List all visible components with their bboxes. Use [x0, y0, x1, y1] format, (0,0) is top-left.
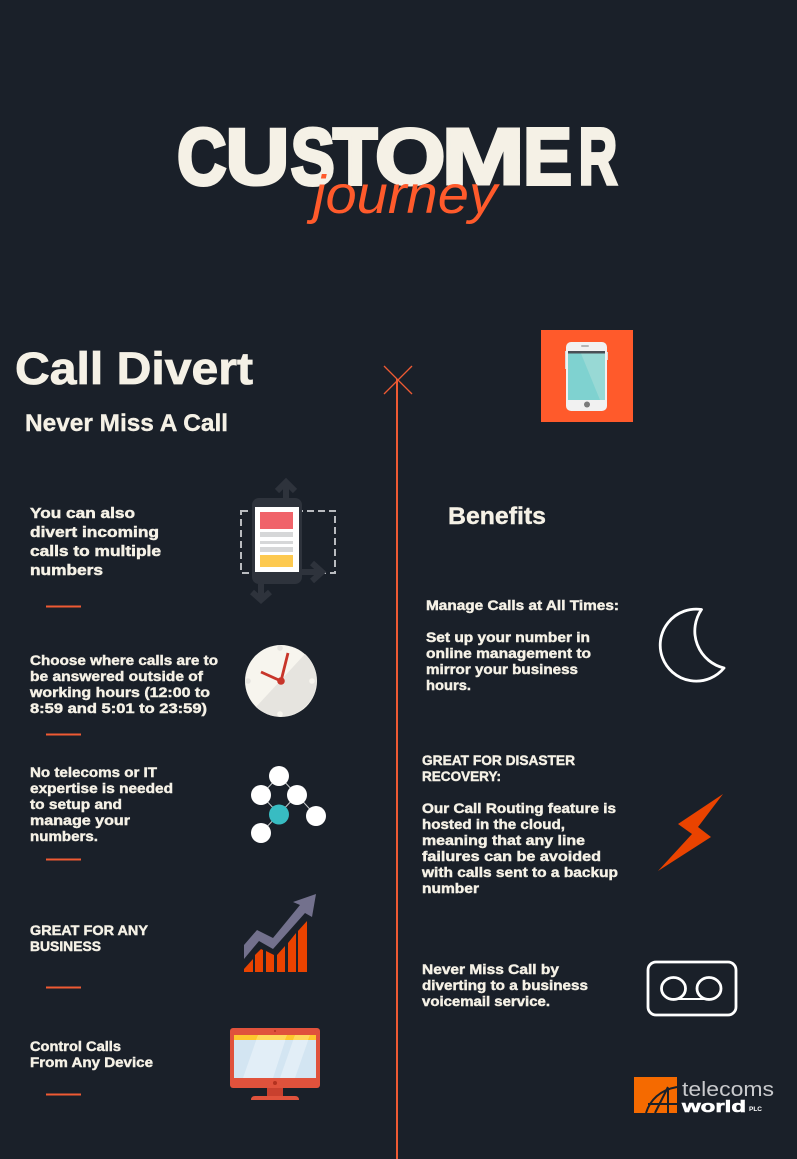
text: no telecoms expertise: No telecoms or IT — [30, 764, 157, 780]
logo: telecoms world: telecoms — [682, 1079, 774, 1101]
title: CUSTOMER — [177, 112, 617, 201]
text: choose where calls are answered: 8:59 and 5:01 to 23:59) — [30, 700, 207, 716]
icon: lightning bolt — [658, 794, 723, 871]
text: manage calls at all times: mirror your business — [426, 661, 578, 677]
divider — [46, 986, 81, 988]
text: great for disaster recovery: failures can be avoided — [422, 848, 601, 864]
text: manage calls at all times: hours. — [426, 677, 471, 693]
text: no telecoms expertise: manage your — [30, 812, 131, 828]
logo: telecoms world — [634, 1077, 774, 1116]
text: great for disaster recovery: with calls sent to a backup — [421, 864, 618, 880]
text: great for disaster recovery: RECOVERY: — [422, 768, 501, 784]
icon: smartphone on orange square — [541, 330, 633, 422]
text: choose where calls are answered: Choose where calls are to — [30, 652, 218, 668]
icon: growth chart — [244, 894, 316, 972]
icon: voicemail — [648, 962, 736, 1015]
divider — [46, 858, 81, 860]
text: never miss call voicemail — [422, 961, 588, 1009]
text: great for any business: BUSINESS — [30, 938, 101, 954]
text: divert to multiple numbers — [30, 505, 161, 579]
text: divert to multiple numbers: divert incoming — [30, 524, 159, 541]
text: choose where calls are answered — [29, 652, 218, 716]
text: great for disaster recovery: number — [422, 880, 480, 896]
text: great for disaster recovery: GREAT FOR DISASTER — [422, 752, 575, 768]
icon: crescent moon — [660, 609, 724, 681]
divider — [46, 606, 81, 608]
heading: Call Divert: Call Divert — [15, 343, 253, 394]
text: never miss call voicemail: Never Miss Call by — [422, 961, 559, 977]
title: CUSTOMER: R — [579, 112, 617, 201]
title: CUSTOMER: M — [442, 112, 525, 201]
logo: telecoms world: PLC — [749, 1107, 763, 1113]
text: divert to multiple numbers: You can also — [30, 505, 135, 522]
text: great for disaster recovery: Our Call Routing feature is — [422, 800, 616, 816]
text: no telecoms expertise: to setup and — [30, 796, 122, 812]
icon: desktop monitor — [230, 1028, 320, 1100]
icon: clock — [245, 645, 317, 717]
text: no telecoms expertise: expertise is needed — [30, 780, 173, 796]
text: great for any business — [30, 922, 149, 954]
text: divert to multiple numbers: calls to multiple — [30, 543, 161, 560]
text: great for disaster recovery — [421, 752, 618, 896]
text: choose where calls are answered: working hours (12:00 to — [29, 684, 210, 700]
text: manage calls at all times: Set up your number in — [426, 629, 590, 645]
title: CUSTOMER: O — [375, 112, 446, 201]
text: control calls from any device: Control Calls — [30, 1038, 121, 1054]
title: CUSTOMER: U — [225, 112, 290, 201]
icon: phone with arrows — [241, 482, 335, 600]
text: control calls from any device — [30, 1038, 153, 1070]
icon: network nodes — [251, 766, 326, 843]
text: control calls from any device: From Any Device — [30, 1054, 153, 1070]
logo: telecoms world: world — [681, 1097, 746, 1116]
subtitle: journey: journey — [306, 165, 500, 225]
title: CUSTOMER: E — [523, 112, 572, 201]
text: manage calls at all times: online management to — [426, 645, 591, 661]
text: manage calls at all times: Manage Calls at All Times: — [426, 597, 619, 613]
divider — [46, 734, 81, 736]
divider — [46, 1094, 81, 1096]
subheading: Never Miss A Call: Never Miss A Call — [25, 410, 228, 437]
text: no telecoms expertise: numbers. — [30, 828, 98, 844]
text: divert to multiple numbers: numbers — [30, 562, 103, 579]
title: CUSTOMER: C — [177, 112, 226, 201]
text: choose where calls are answered: be answered outside of — [30, 668, 203, 684]
title: CUSTOMER: S — [291, 112, 335, 201]
text: great for disaster recovery: meaning that any line — [422, 832, 585, 848]
text: no telecoms expertise — [30, 764, 173, 844]
text: never miss call voicemail: voicemail service. — [422, 993, 550, 1009]
text: great for any business: GREAT FOR ANY — [30, 922, 149, 938]
timeline line with cross marker — [384, 366, 412, 1159]
text: never miss call voicemail: diverting to a business — [422, 977, 588, 993]
title: CUSTOMER: T — [333, 112, 377, 201]
text: great for disaster recovery: hosted in the cloud, — [422, 816, 565, 832]
text: manage calls at all times — [426, 597, 619, 693]
heading: Benefits: Benefits — [448, 503, 546, 530]
